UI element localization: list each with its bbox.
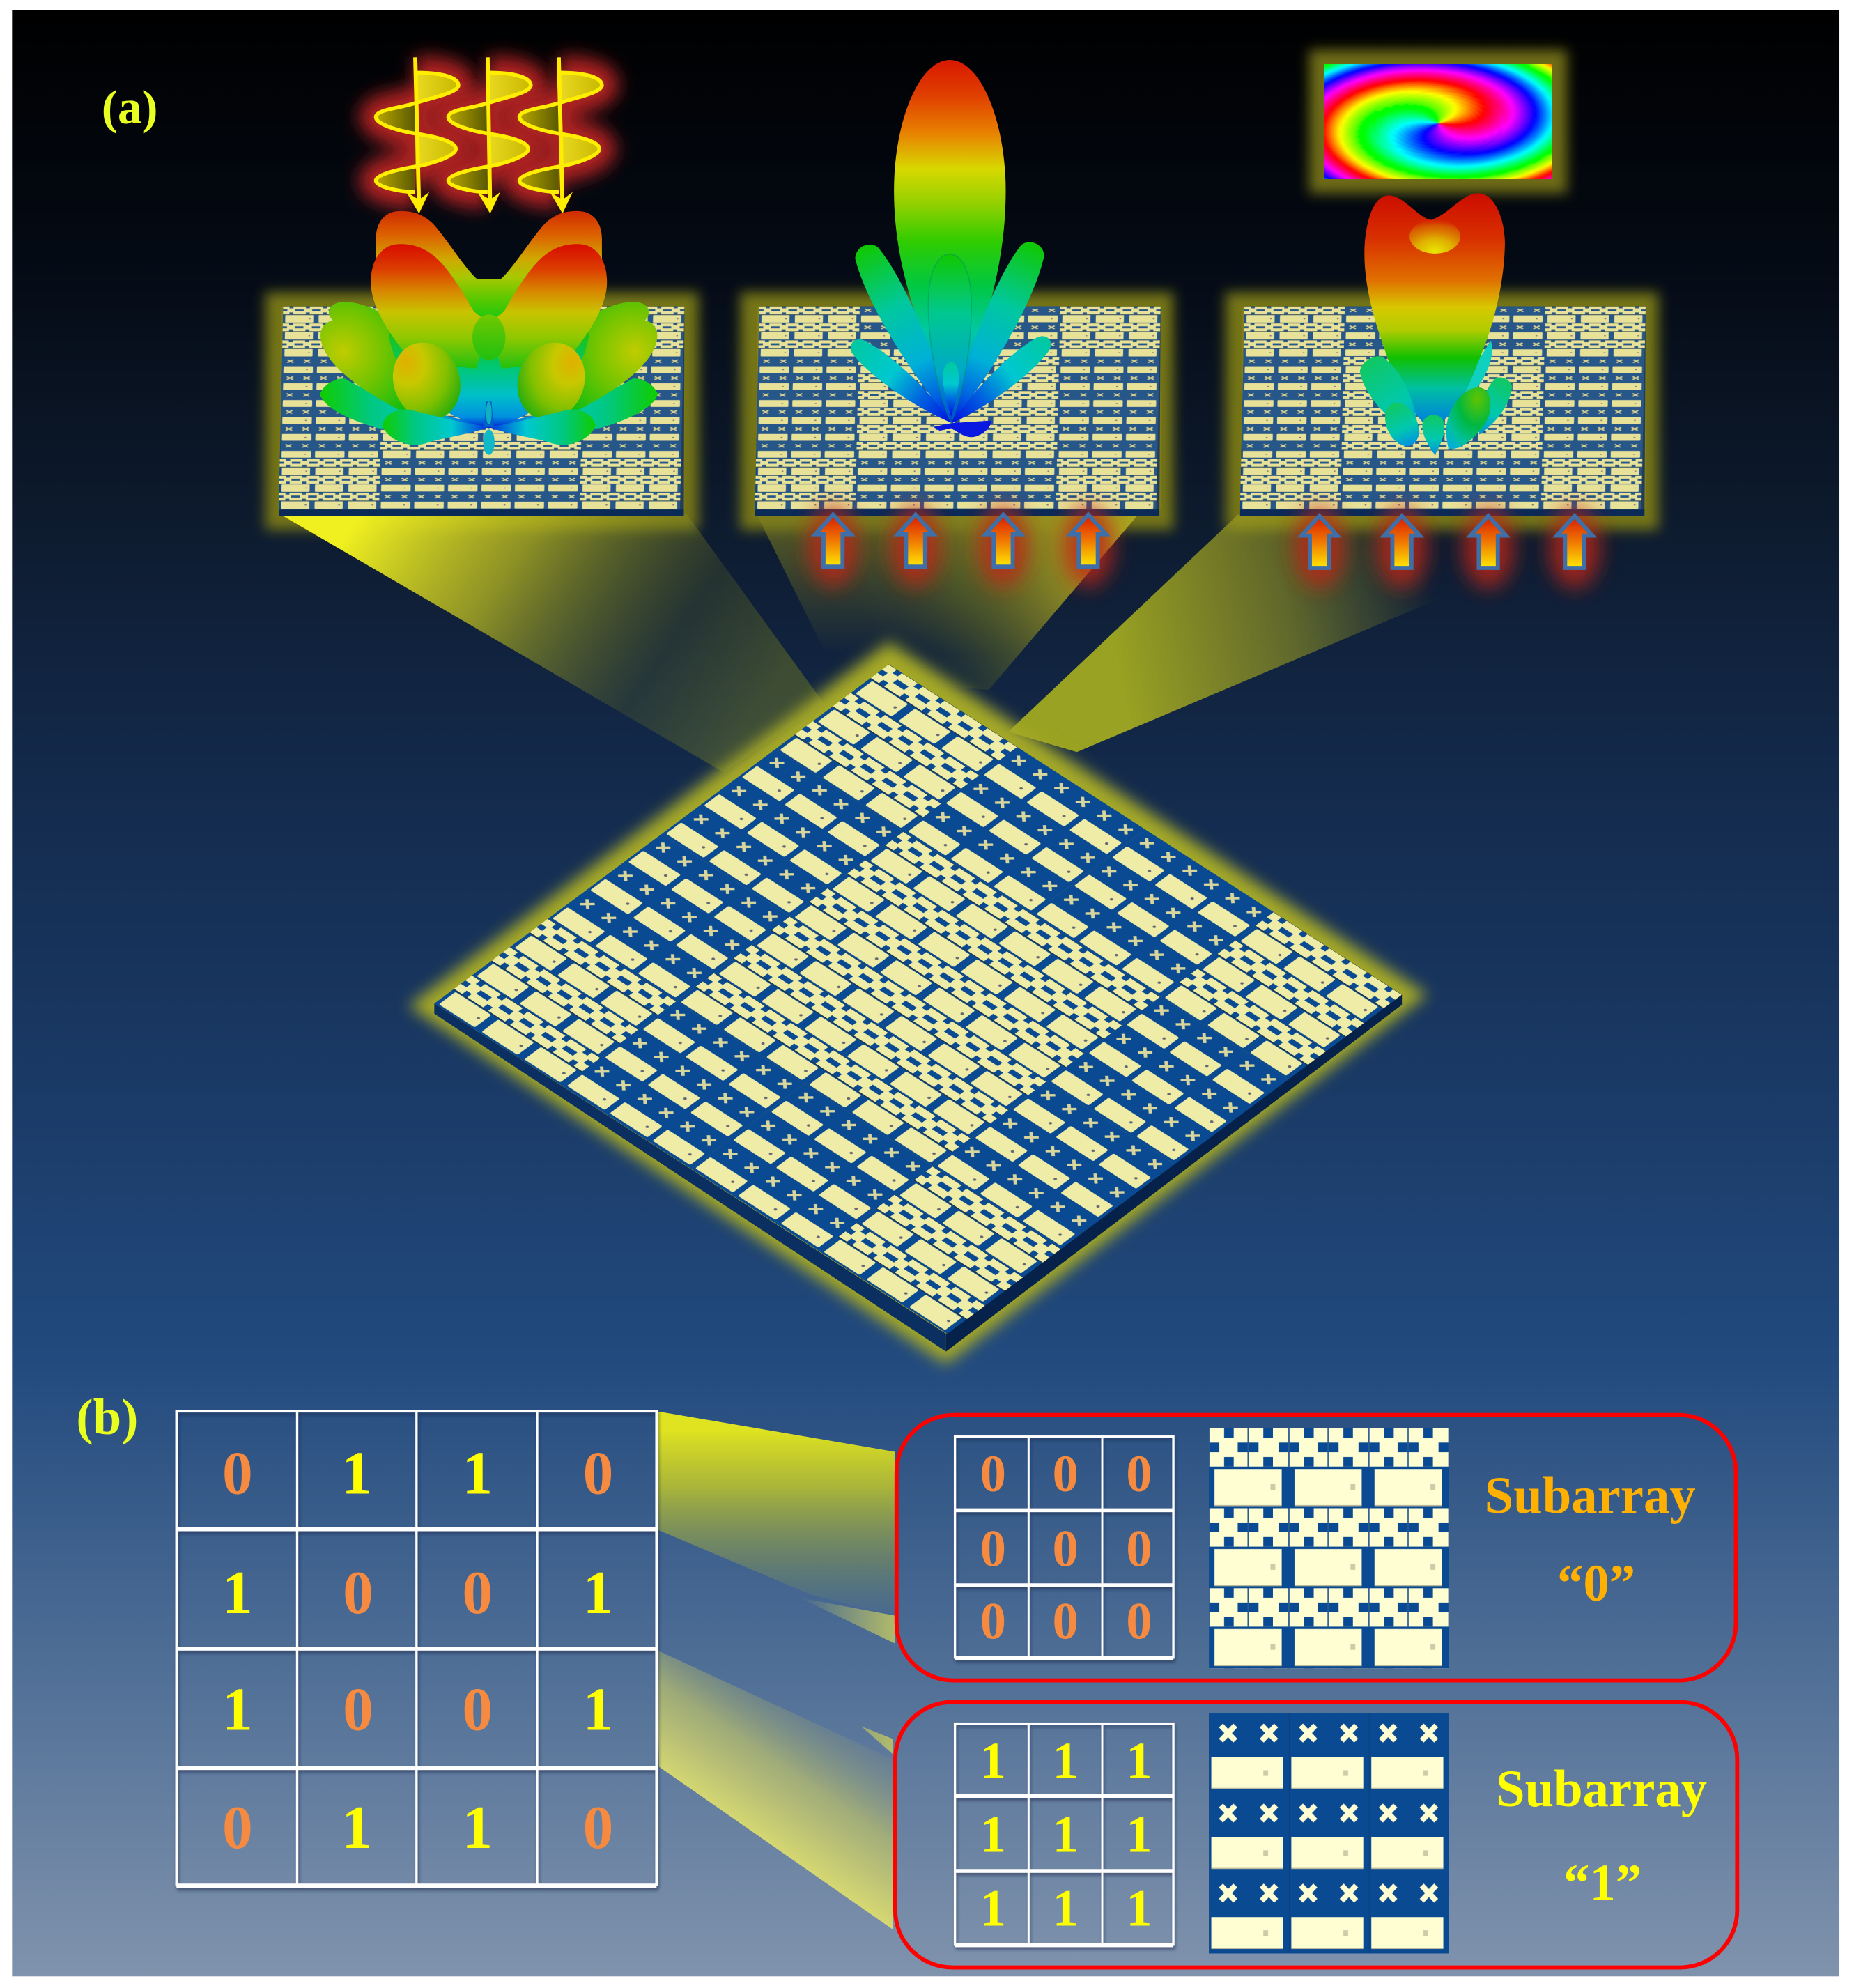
4x4 coding grid: 0 <box>583 1440 613 1507</box>
incident feed arrows under plate 3 <box>1294 507 1600 588</box>
radiation pattern: four-beam butterfly <box>320 211 658 455</box>
subarray 1 caption: Subarray <box>1496 1760 1707 1818</box>
subarray 1 digit grid: 1 <box>1126 1806 1152 1864</box>
plate 2: reflective array <box>755 307 1161 516</box>
panel: subarray 1 <box>895 1702 1737 1968</box>
4x4 coding grid: 1 <box>583 1676 613 1743</box>
subarray 0 digit grid: 0 <box>980 1520 1006 1578</box>
subarray 0 digit grid: 0 <box>1052 1592 1079 1650</box>
subarray 1 caption: “1” <box>1563 1854 1641 1912</box>
glow around plate 3 <box>1226 293 1658 530</box>
subarray 0 digit grid: 0 <box>1052 1520 1079 1578</box>
subarray 0 caption: Subarray <box>1485 1467 1696 1525</box>
subarray 0 digit grid: 0 <box>1126 1520 1152 1578</box>
incident circularly polarised waves <box>376 57 602 216</box>
subarray 0 caption: “0” <box>1557 1555 1635 1612</box>
subarray 1 caption <box>1496 1760 1707 1912</box>
glow around plate 1 <box>265 293 698 530</box>
4x4 coding grid: 1 <box>341 1794 372 1861</box>
subarray 0 digit grid <box>955 1437 1173 1658</box>
glow around plate 2 <box>741 293 1173 530</box>
subarray 1 digit grid: 1 <box>1052 1879 1079 1937</box>
4x4 coding grid: 0 <box>583 1794 613 1861</box>
radiation pattern: vortex beam <box>1353 193 1516 455</box>
subarray 0 digit grid: 0 <box>980 1592 1006 1650</box>
beam from grid to subarray 0 <box>656 1411 895 1644</box>
spiral phase map <box>1324 64 1552 179</box>
4x4 coding grid: 1 <box>341 1440 372 1507</box>
subarray 0 digit grid: 0 <box>980 1445 1006 1503</box>
plate 1: reflective array <box>279 307 684 516</box>
subarray 0 digit grid: 0 <box>1052 1445 1079 1503</box>
4x4 coding grid: 1 <box>462 1440 493 1507</box>
4x4 coding grid: 1 <box>583 1559 613 1626</box>
light beam: plate 1 to diamond <box>281 514 824 772</box>
large isometric metasurface <box>409 642 1428 1364</box>
subarray 1 digit grid: 1 <box>1126 1732 1152 1790</box>
subarray 0 digit grid: 0 <box>1126 1445 1152 1503</box>
radiation pattern: single pencil beam <box>845 60 1057 437</box>
glow behind the OAM spiral <box>1309 49 1567 193</box>
subarray 1 unit cell pattern <box>1209 1713 1449 1953</box>
4x4 coding grid: 1 <box>222 1676 253 1743</box>
4x4 coding grid: 0 <box>462 1559 493 1626</box>
4x4 coding grid: 1 <box>222 1559 253 1626</box>
subarray 0 unit cell pattern <box>1209 1428 1449 1668</box>
subarray 0 digit grid: 0 <box>1126 1592 1152 1650</box>
4x4 coding grid: 0 <box>222 1440 253 1507</box>
4x4 coding grid: 0 <box>343 1559 373 1626</box>
subarray 0 caption <box>1485 1467 1696 1612</box>
4x4 coding grid: 0 <box>343 1676 373 1743</box>
label (b): (b) <box>76 1389 138 1445</box>
incident feed arrows under plate 2 <box>808 506 1113 587</box>
plate 3: reflective array <box>1240 307 1646 516</box>
subarray 1 digit grid: 1 <box>1052 1806 1079 1864</box>
subarray 1 digit grid: 1 <box>980 1879 1006 1937</box>
panel: subarray 0 <box>897 1415 1736 1681</box>
label (a): (a) <box>102 80 158 134</box>
subarray 1 digit grid: 1 <box>980 1732 1006 1790</box>
subarray 1 digit grid: 1 <box>1052 1732 1079 1790</box>
4x4 coding grid <box>176 1411 656 1886</box>
4x4 coding grid: 1 <box>462 1794 493 1861</box>
light beam: plate 3 to diamond <box>1008 514 1638 752</box>
4x4 coding grid: 0 <box>462 1676 493 1743</box>
subarray 1 digit grid <box>955 1724 1173 1945</box>
4x4 coding grid: 0 <box>222 1794 253 1861</box>
light beam: plate 2 to diamond <box>757 509 1143 690</box>
subarray 1 digit grid: 1 <box>980 1806 1006 1864</box>
subarray 1 digit grid: 1 <box>1126 1879 1152 1937</box>
beam from grid to subarray 1 <box>656 1650 893 1929</box>
